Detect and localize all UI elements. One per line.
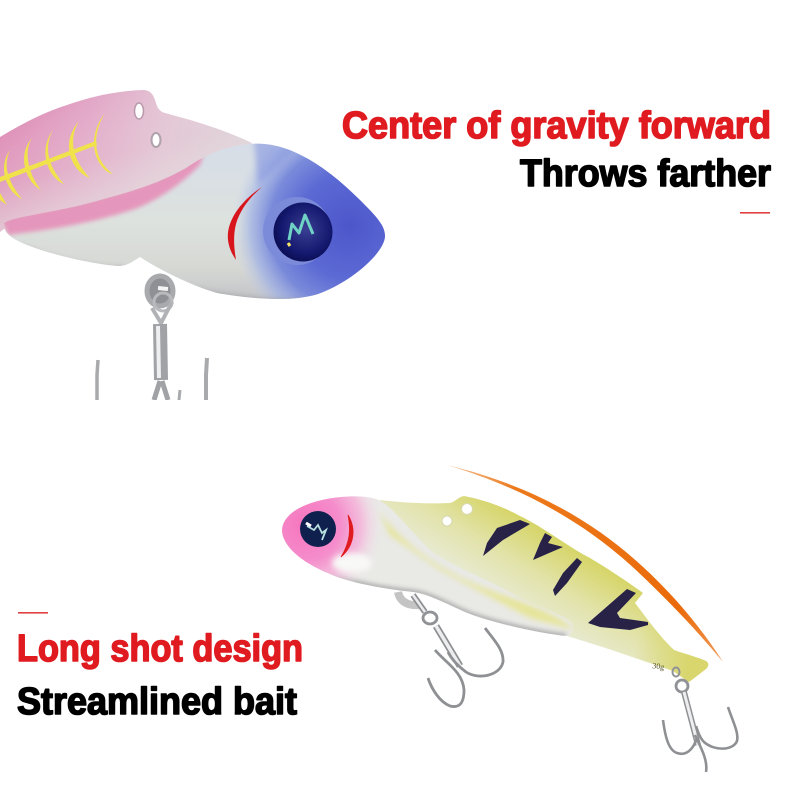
red rule left (18, 612, 48, 614)
lip plate with stripes (380, 496, 708, 682)
subheading: streamlined bait: Streamlined bait (17, 681, 297, 723)
lure: blue and pink head close-up (0, 90, 400, 400)
subheading: throws farther: Throws farther (520, 153, 771, 195)
red gill slash (341, 515, 353, 557)
orange trajectory arc (447, 465, 723, 662)
body with pink head (282, 496, 573, 636)
hook hardware: ring and swivel (97, 276, 207, 400)
body with blue head and pink stripe (4, 144, 385, 299)
eye: socket and holographic pupil (263, 197, 332, 265)
heading: long shot design: Long shot design (17, 628, 303, 670)
lure: full yellow and pink lure (282, 496, 739, 772)
red rule right (740, 212, 770, 214)
tail hook with treble (663, 668, 737, 772)
belly hook with treble (398, 592, 503, 707)
eye: holographic pupil (300, 511, 336, 547)
lip plate with stripes: 30g (652, 661, 665, 672)
heading: center of gravity: Center of gravity forward (342, 105, 771, 147)
lip plate with holes (0, 90, 252, 232)
yellow fishbone marking (0, 113, 113, 205)
red gill slash (228, 187, 262, 260)
